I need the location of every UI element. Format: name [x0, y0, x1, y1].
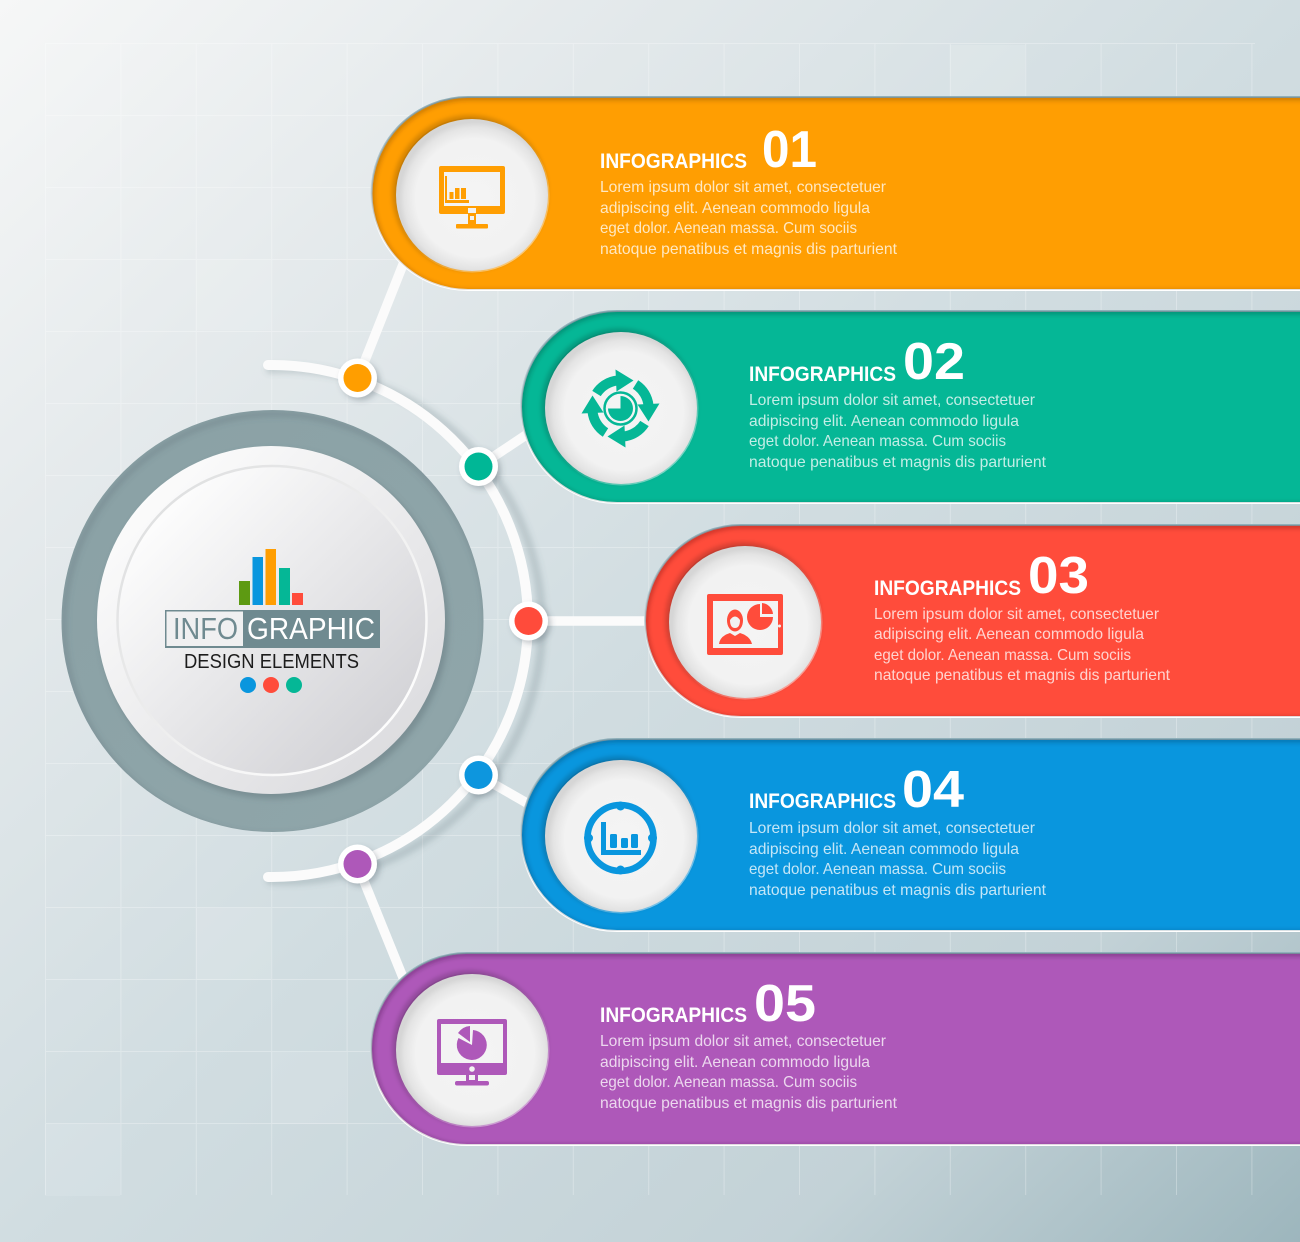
logo wordmark	[165, 610, 380, 648]
number: 01	[762, 121, 817, 179]
icon hole	[541, 756, 698, 914]
central disc	[97, 446, 449, 799]
body text: eget dolor. Aenean massa. Cum sociis	[749, 433, 1006, 450]
body text: natoque penatibus et magnis dis parturient	[600, 1095, 898, 1112]
connector arc	[268, 365, 542, 881]
connector spokes	[357, 262, 655, 980]
icon hole	[392, 115, 550, 272]
icon: tablet with presenter and pie	[707, 594, 783, 655]
heading: INFOGRAPHICS	[600, 150, 747, 173]
body text	[600, 1033, 898, 1112]
logo bar chart	[239, 549, 303, 605]
body text: eget dolor. Aenean massa. Cum sociis	[749, 861, 1006, 878]
body text: Lorem ipsum dolor sit amet, consectetuer	[600, 1033, 887, 1050]
body text: adipiscing elit. Aenean commodo ligula	[600, 1054, 870, 1071]
logo wordmark: GRAPHIC	[247, 611, 375, 646]
panel: 03 red	[645, 525, 1300, 719]
body text: Lorem ipsum dolor sit amet, consectetuer	[600, 179, 887, 196]
body text	[874, 606, 1171, 684]
icon: monitor with bar chart	[439, 166, 505, 228]
icon: cycle arrows with pie	[582, 370, 660, 448]
body text: Lorem ipsum dolor sit amet, consectetuer	[749, 820, 1036, 837]
heading: INFOGRAPHICS	[749, 363, 896, 386]
panel: 01 orange	[372, 97, 1300, 292]
central ring	[62, 410, 486, 836]
body text: adipiscing elit. Aenean commodo ligula	[600, 200, 870, 217]
body text: adipiscing elit. Aenean commodo ligula	[874, 626, 1144, 643]
icon hole	[665, 542, 822, 700]
central logo	[165, 549, 380, 693]
node: purple	[338, 844, 377, 884]
body text: natoque penatibus et magnis dis parturient	[749, 882, 1047, 899]
heading: INFOGRAPHICS	[874, 577, 1021, 600]
body text: natoque penatibus et magnis dis parturient	[749, 454, 1047, 471]
node: red	[509, 602, 548, 640]
icon hole	[541, 328, 698, 486]
body text: natoque penatibus et magnis dis parturient	[874, 667, 1171, 684]
panel: 04 blue	[521, 739, 1300, 933]
body text: Lorem ipsum dolor sit amet, consectetuer	[749, 392, 1036, 409]
number: 03	[1028, 547, 1089, 605]
panel: 05 purple	[371, 953, 1300, 1147]
body text: eget dolor. Aenean massa. Cum sociis	[874, 647, 1131, 664]
icon hole	[392, 970, 550, 1128]
body text: eget dolor. Aenean massa. Cum sociis	[600, 1074, 857, 1091]
logo dots	[240, 677, 302, 693]
node: blue	[459, 756, 498, 794]
body text	[600, 179, 898, 258]
body text: adipiscing elit. Aenean commodo ligula	[749, 841, 1019, 858]
body text: natoque penatibus et magnis dis parturient	[600, 241, 898, 258]
logo wordmark: INFO	[173, 611, 238, 646]
body text: Lorem ipsum dolor sit amet, consectetuer	[874, 606, 1160, 623]
number: 02	[903, 333, 965, 391]
heading: INFOGRAPHICS	[749, 790, 896, 813]
node: orange	[338, 358, 377, 398]
panel: 02 green	[521, 311, 1300, 505]
body text: eget dolor. Aenean massa. Cum sociis	[600, 220, 857, 237]
body text: adipiscing elit. Aenean commodo ligula	[749, 413, 1019, 430]
heading: INFOGRAPHICS	[600, 1004, 747, 1027]
body text	[749, 392, 1047, 471]
node: green	[459, 447, 498, 486]
logo subtitle: DESIGN ELEMENTS	[184, 651, 359, 673]
body text	[749, 820, 1047, 899]
icon: target with bar chart	[584, 802, 657, 874]
number: 05	[754, 975, 816, 1033]
number: 04	[902, 761, 964, 819]
icon: monitor with pie	[437, 1019, 507, 1086]
